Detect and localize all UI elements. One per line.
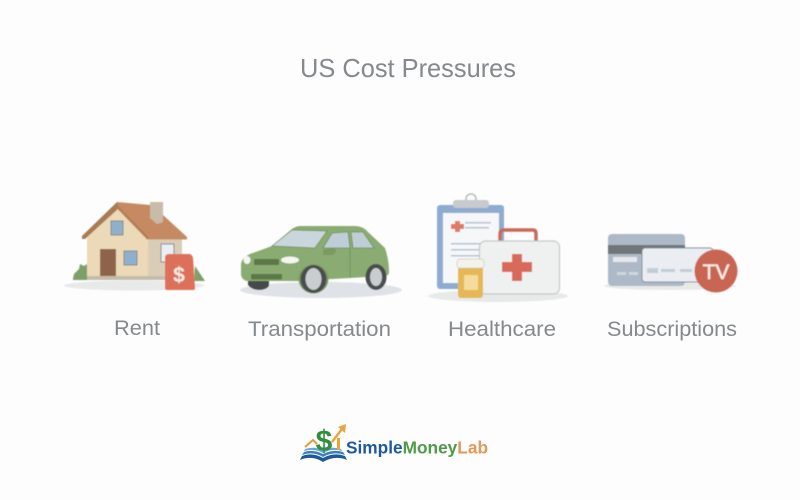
icon: book, dollar sign and growth arrow: $ xyxy=(316,425,333,458)
icon: book, dollar sign and growth arrow xyxy=(300,424,347,462)
wordmark: SimpleMoneyLab xyxy=(346,438,488,458)
icon: house with price tag: $ xyxy=(173,264,185,287)
title: US Cost Pressures xyxy=(300,53,516,83)
label: transportation: Transportation xyxy=(248,318,391,341)
panel: transportation xyxy=(240,226,402,341)
panel: rent xyxy=(64,202,205,340)
icon: green car xyxy=(240,226,402,298)
icon: credit cards with TV badge: TV xyxy=(703,261,729,284)
logo: SimpleMoneyLab xyxy=(300,424,488,462)
panel: healthcare xyxy=(428,194,568,341)
icon: clipboard, first aid kit and pill bottle xyxy=(428,194,568,302)
label: subscriptions: Subscriptions xyxy=(607,318,737,341)
panel: subscriptions xyxy=(604,234,738,341)
label: healthcare: Healthcare xyxy=(448,318,556,341)
icon: house with price tag xyxy=(64,202,205,290)
label: rent: Rent xyxy=(114,317,160,340)
